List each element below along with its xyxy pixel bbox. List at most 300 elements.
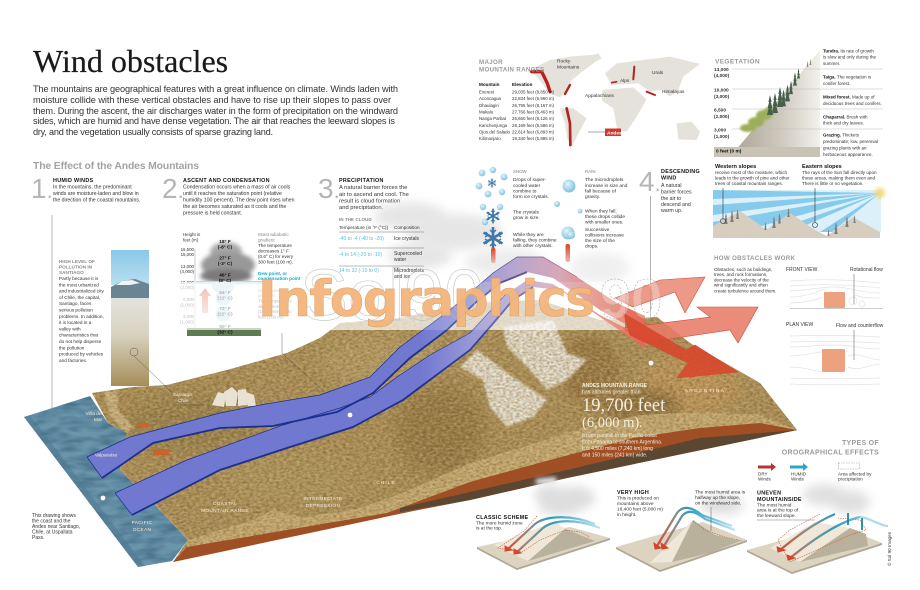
step 3: precipitation: and precipitation. xyxy=(339,205,384,211)
gradient notes: gradient xyxy=(258,238,275,242)
ocean xyxy=(20,390,190,570)
pollution note: characteristics that xyxy=(59,333,99,338)
mountain table: Ojos del Salado xyxy=(479,130,511,134)
watermark: Infographics xyxy=(258,270,595,328)
vegetation descriptions: Tundra. Its rate of growth xyxy=(823,48,874,54)
mountain table: 19,340 feet (5,895 m) xyxy=(512,136,555,141)
cloud composition table: -4 to 14 (-20 to -10) xyxy=(339,252,382,258)
gradient notes: Dew point, or xyxy=(258,271,287,276)
cities in orange xyxy=(137,423,169,455)
diagram: very high: The most humid area is xyxy=(695,490,746,496)
snow text: cooled water xyxy=(513,183,541,189)
vegetation descriptions: herbaceous appearance. xyxy=(823,152,873,157)
height inset: temperature by altitude: 13,000 xyxy=(181,264,195,269)
cloud composition table: and ice xyxy=(394,274,410,280)
diagram: very high: 16,400 feet (5,000 m) xyxy=(617,506,663,512)
temperature labels: 90° F xyxy=(219,324,231,330)
terrain labels: Santiago, xyxy=(173,392,193,398)
terrain labels: Chile xyxy=(178,398,189,404)
gradient notes: (0.6° C) for every xyxy=(258,254,294,259)
diagram: classic scheme: CLASSIC SCHEME xyxy=(476,515,529,521)
rain text: the size of the xyxy=(585,238,615,244)
plan view diagram: PLAN VIEW xyxy=(786,322,814,328)
cloud composition table: IN THE CLOUD xyxy=(339,217,372,222)
step 4: descending wind: A natural xyxy=(661,183,681,189)
diagram: uneven mountainside: the leeward slope. xyxy=(757,513,796,519)
height inset: temperature by altitude: 10,000 xyxy=(181,280,195,285)
rain text: increase in size and xyxy=(585,183,628,189)
snow fields xyxy=(460,350,547,427)
pollution note: POLLUTION IN xyxy=(59,264,93,270)
gradient notes: The temperature xyxy=(258,243,292,248)
step 4: descending wind: WIND xyxy=(661,176,677,182)
diagram: uneven mountainside: area is at the top of xyxy=(757,508,799,514)
gradient notes: condensation point xyxy=(258,276,301,281)
altitude labels: 0 feet (0 m) xyxy=(716,148,742,154)
rain text: these drops collide xyxy=(585,214,625,220)
altitude labels: 13,000 xyxy=(714,67,729,73)
panel: western and eastern slopes: leads to the growth of pine and other xyxy=(715,176,790,180)
callout: Andes mountain range: ANDES MOUNTAIN RANGE xyxy=(582,383,648,389)
step 4: descending wind xyxy=(639,166,700,363)
panel: western and eastern slopes: Western slopes xyxy=(715,164,756,170)
air parcels xyxy=(212,281,234,322)
descending red arrows xyxy=(615,277,758,378)
terrain labels: MOUNTAIN RANGE xyxy=(201,508,249,514)
pollution note: the most urbanized xyxy=(59,282,99,287)
snow text xyxy=(513,169,557,249)
height inset: temperature by altitude: 3,000 xyxy=(183,314,195,319)
rain text: with smaller ones. xyxy=(585,220,623,226)
panel: types of orographical effects legend: Area affected by xyxy=(838,472,872,476)
mountain table: Kilimanjaro xyxy=(479,136,501,141)
mountain table: 22,834 feet (6,960 m) xyxy=(512,96,555,101)
intro text: moisture collide with these vertical obstacles and have to rise up their slopes to pass over xyxy=(33,95,391,105)
mountain table: Kanchenjunga xyxy=(479,123,508,128)
temperature labels: 46° F xyxy=(219,272,231,278)
drawing note: Pass. xyxy=(32,535,45,541)
diagram: very high xyxy=(616,490,747,572)
vegetation descriptions: Chaparral. Brush with xyxy=(823,114,868,120)
plan view diagram: Flow and counterflow xyxy=(836,323,884,329)
diagram: very high: on the windward side. xyxy=(695,500,741,506)
pollution note: serious pollution xyxy=(59,308,93,312)
terrain block xyxy=(20,282,805,570)
cloud composition table: 14 to 32 (-10 to 0) xyxy=(339,268,379,274)
pollution note: Partly because it is xyxy=(59,276,99,281)
cloud composition table: Supercooled xyxy=(394,251,422,257)
vegetation descriptions: thick and dry leaves. xyxy=(823,120,864,126)
pollution note: of Chile, the capital, xyxy=(59,295,100,300)
panel: western and eastern slopes xyxy=(713,164,885,238)
step 3: precipitation: A natural barrier forces the xyxy=(339,185,407,191)
rising air arrow xyxy=(199,288,211,313)
rain text xyxy=(585,169,628,250)
mountain table: Elevation xyxy=(512,82,533,87)
terrain labels: INTERMEDIATE xyxy=(304,496,342,502)
rain text: Successive xyxy=(585,227,610,233)
panel: western and eastern slopes: The rays of the Sun fall directly upon xyxy=(802,170,877,175)
vegetation descriptions: deciduous trees and conifers. xyxy=(823,101,882,106)
height inset: temperature by altitude: 6,500 xyxy=(183,297,195,302)
step 1: humid winds: In the mountains, the predominant xyxy=(53,184,132,190)
pollution note: HIGH LEVEL OF xyxy=(59,259,95,264)
mountain table: Mountain xyxy=(479,82,500,87)
diagram: very high: This is produced on xyxy=(617,496,659,502)
altitude labels: 3,000 xyxy=(714,128,726,134)
terrain labels: ARGENTINA xyxy=(685,388,725,394)
cloud composition table: Microdroplets xyxy=(394,268,425,274)
panel: how obstacles work xyxy=(714,255,884,385)
panel: how obstacles work: HOW OBSTACLES WORK xyxy=(714,255,795,262)
temperature labels: (-3° C) xyxy=(218,261,232,267)
mountain table: Everest xyxy=(479,90,495,94)
intro text xyxy=(33,84,398,137)
altitude labels xyxy=(714,67,742,154)
step 1: humid winds xyxy=(31,173,140,204)
callout: Andes mountain range: It is 4,500 miles (7,240 km) long xyxy=(582,446,653,452)
conifers xyxy=(767,59,811,115)
step 4: descending wind: the air to xyxy=(661,196,681,202)
slopes xyxy=(713,211,880,238)
vegetation descriptions: Grazing. Thickets xyxy=(823,132,860,138)
height inset: temperature by altitude: 15,000 xyxy=(181,252,195,257)
height inset: temperature by altitude: feet (m) xyxy=(183,238,199,242)
snow text: The crystals xyxy=(513,210,539,216)
step 3: precipitation: air to ascend and cool. The xyxy=(339,192,409,198)
step 1: humid winds: the direction of the coastal mountains. xyxy=(53,198,140,204)
terrain labels: Mar xyxy=(94,417,103,423)
mountain table: 26,795 feet (8,167 m) xyxy=(512,103,555,108)
panel: types of orographical effects legend: precipitation xyxy=(838,476,863,482)
snow text: combine to xyxy=(513,188,537,194)
diagram: uneven mountainside: MOUNTAINSIDE xyxy=(757,497,802,503)
callout: Andes mountain range: It runs parallel to the Pacific coast xyxy=(582,433,657,439)
diagram: classic scheme: The more humid zone xyxy=(476,520,523,526)
temperature labels: (-8° C) xyxy=(218,244,232,250)
snow text: While they are xyxy=(513,232,544,238)
diagram: classic scheme xyxy=(476,477,610,570)
drawing note xyxy=(32,513,80,541)
intro text: dry, and the vegetation usually consists of sparse grazing land. xyxy=(33,127,273,137)
terrain labels: CHILE xyxy=(376,480,396,486)
panel: types of orographical effects legend: HUMID xyxy=(791,472,807,476)
panel: major mountain ranges map: MOUNTAIN RANGES xyxy=(479,66,545,74)
gradient notes: feet (100 m). xyxy=(258,314,284,320)
step 2: ascent and condensation: ASCENT AND CONDENSATION xyxy=(183,178,270,184)
snow icons xyxy=(476,167,507,263)
vegetation descriptions: conifer forest. xyxy=(823,81,850,86)
diagram: classic scheme: is at the top. xyxy=(476,526,502,532)
step 4: descending wind: barrier forces xyxy=(661,190,692,196)
step 2: ascent and condensation: Condensation occurs when a mass of air cools xyxy=(183,184,291,190)
pollution note: it is located in a xyxy=(59,320,92,325)
mountain table: 22,614 feet (6,893 m) xyxy=(512,130,555,134)
temperature labels: (12° C) xyxy=(217,296,233,302)
terrain labels: PACIFIC xyxy=(132,520,153,526)
diagram: very high: VERY HIGH xyxy=(617,490,649,496)
step 3: precipitation: 3. xyxy=(318,173,340,204)
rain text: RAIN xyxy=(585,169,596,174)
callout: Andes mountain range: 19,700 feet xyxy=(582,396,666,416)
diagram: uneven mountainside: The most humid xyxy=(757,502,792,508)
drawing note: Chile, at Uspallata xyxy=(32,530,73,536)
step 3: precipitation xyxy=(318,173,409,211)
pollution note: Santiago, faces xyxy=(59,301,92,306)
pollution note: and factories. xyxy=(59,358,87,363)
intro text: sides, which are humid and have dense vegetation. The air that reaches the leeward slopes is xyxy=(33,116,395,126)
drawing note: Andes near Santiago, xyxy=(32,524,80,530)
temperature labels: (8° C) xyxy=(219,278,232,284)
cloud composition table: Composition xyxy=(394,225,420,230)
step 4: descending wind: DESCENDING xyxy=(661,169,700,175)
snow text: grow in size. xyxy=(513,215,540,221)
wind band: upper xyxy=(87,257,645,478)
title: Wind obstacles xyxy=(33,43,228,79)
pollution note: SANTIAGO xyxy=(59,270,84,275)
Santiago city xyxy=(212,387,256,407)
altitude labels: (4,000) xyxy=(714,73,730,79)
snow text: with other crystals. xyxy=(513,243,553,249)
ground xyxy=(187,328,261,336)
cloud composition table xyxy=(339,217,425,280)
wind band: lower xyxy=(115,280,645,515)
band edges xyxy=(87,257,577,515)
step 4: descending wind: 4. xyxy=(639,166,661,197)
watermark xyxy=(170,256,662,336)
gradient notes: (1° C) every 300 xyxy=(258,309,292,314)
mountain table: 27,766 feet (8,463 m) xyxy=(512,110,555,114)
plan view diagram xyxy=(786,322,884,385)
gradient notes: decreases 1° F xyxy=(258,304,289,309)
terrain shading xyxy=(80,295,805,570)
vegetation descriptions: predominate; low, perennial xyxy=(823,139,878,144)
temperature labels: 72° F xyxy=(219,306,231,312)
panel: vegetation: VEGETATION xyxy=(715,58,760,66)
vegetation descriptions: summer. xyxy=(823,61,840,66)
gradient notes: The temperature xyxy=(258,298,292,304)
mountain table: Dhaulagiri xyxy=(479,103,499,108)
height inset: temperature by altitude: (4,000) xyxy=(180,269,195,274)
pollution note: do not help disperse xyxy=(59,339,102,344)
condensation band xyxy=(196,281,270,284)
height inset: temperature by altitude: 0 xyxy=(192,330,195,335)
terrain labels: OCEAN xyxy=(133,527,152,533)
callout: Andes mountain range xyxy=(582,383,666,458)
map heading: MAJOR xyxy=(479,59,503,66)
panel: types of orographical effects legend: Winds xyxy=(758,476,771,482)
panel: how obstacles work: decrease the velocity of the xyxy=(714,278,769,282)
panel: major mountain ranges map xyxy=(479,53,700,147)
rain text: The microdroplets xyxy=(585,177,624,183)
altitude labels: (3,000) xyxy=(714,94,730,100)
panel: types of orographical effects legend: OROGRAPHICAL EFFECTS xyxy=(782,450,879,456)
wash over the top of the ridge xyxy=(170,282,625,330)
snow text: Drops of super- xyxy=(513,177,546,183)
step 1: humid winds: HUMID WINDS xyxy=(53,178,94,184)
vegetation descriptions: Mixed forest. Made up of xyxy=(823,94,875,100)
bushes xyxy=(740,107,776,132)
temperature labels: 27° F xyxy=(219,256,231,262)
marker dots xyxy=(101,361,653,500)
world map xyxy=(530,53,700,147)
pollution note: and industrialized city xyxy=(59,289,104,294)
step 4: descending wind: descend and xyxy=(661,202,691,208)
mountain table: Makalu xyxy=(479,110,494,114)
mountain table: Aconcagua xyxy=(479,96,502,101)
callout: Andes mountain range: (6,000 m). xyxy=(582,415,643,431)
front view diagram xyxy=(786,267,883,308)
diagram: very high: halfway up the slope, xyxy=(695,495,740,501)
panel: how obstacles work: wind significantly and often xyxy=(714,282,768,288)
step 2: ascent and condensation: 2. xyxy=(162,173,184,204)
gradient notes: Moist adiabatic xyxy=(258,232,289,237)
range labels: Alps xyxy=(620,78,630,84)
altitude labels: (1,000) xyxy=(714,134,730,140)
step 3: precipitation: result is cloud formation xyxy=(339,198,400,204)
photo: Santiago valley inset xyxy=(111,250,149,386)
panel: types of orographical effects legend: Winds xyxy=(791,476,804,482)
diagram: uneven mountainside xyxy=(747,484,888,574)
diagram: very high: in height. xyxy=(617,512,636,518)
diagram: uneven mountainside: UNEVEN xyxy=(757,490,781,496)
intro text: them. During the ascent, the air discharges water in the form of precipitation on the windward xyxy=(33,106,398,116)
mountain table xyxy=(479,82,555,141)
range labels: Rocky xyxy=(557,58,571,64)
panel: types of orographical effects legend xyxy=(758,440,879,482)
panel: types of orographical effects legend: TYPES OF xyxy=(842,440,879,447)
rain text: collisions increase xyxy=(585,232,624,238)
cloud composition table: water xyxy=(394,257,407,263)
section heading: The Effect of the Andes Mountains xyxy=(33,161,199,172)
step 4: descending wind: warm up. xyxy=(661,208,682,214)
temperature labels: 18° F xyxy=(219,239,231,245)
terrain labels: Valparaíso xyxy=(95,452,118,458)
cloud composition table: Temperature (in °F (°C)) xyxy=(339,225,389,230)
cloud composition table: Ice crystals xyxy=(394,236,420,242)
range labels: Himalayas xyxy=(662,89,685,95)
callout: Andes mountain range: and 150 miles (241 km) wide. xyxy=(582,452,647,458)
soil strata xyxy=(173,423,797,562)
terrain labels: COASTAL xyxy=(213,501,237,507)
panel: western and eastern slopes: trees of coastal mountain ranges. xyxy=(715,181,783,186)
drawing note: the coast and the xyxy=(32,518,71,524)
altitude labels: (2,000) xyxy=(714,114,730,120)
panel: types of orographical effects legend: DRY xyxy=(758,472,768,476)
mountain table: 28,169 feet (8,586 m) xyxy=(512,123,555,128)
step 2: ascent and condensation: the air becomes saturated as it cools and the xyxy=(183,204,286,210)
sand ribbon xyxy=(187,412,797,547)
vegetation descriptions xyxy=(823,48,882,157)
height inset: temperature by altitude: (3,000) xyxy=(180,285,195,290)
mountain table: 26,660 feet (8,126 m) xyxy=(512,116,555,121)
copyright: © Sol 90 Images xyxy=(886,531,892,566)
range labels: Appalachians xyxy=(585,93,614,99)
altitude labels: 6,500 xyxy=(714,108,726,114)
gradient notes: Dry adiabatic xyxy=(258,288,286,293)
range labels: Mountains xyxy=(557,64,580,70)
diagram: very high: mountains above xyxy=(617,501,654,507)
sun xyxy=(875,188,885,198)
pollution note: problems. In addition, xyxy=(59,314,104,319)
callout: Andes mountain range: has altitudes greater than xyxy=(582,390,641,396)
temperature labels: (32° C) xyxy=(217,330,233,336)
temperature labels xyxy=(217,239,233,336)
snow text: falling, they combine xyxy=(513,238,557,244)
panel: vegetation xyxy=(714,48,883,157)
panel: how obstacles work: create turbulence around them. xyxy=(714,288,777,294)
mountain ranges in red xyxy=(532,67,655,145)
terrain labels: DEPRESSION xyxy=(306,503,340,509)
snow text: SNOW xyxy=(513,169,528,174)
step 2: ascent and condensation: humidity 100 percent). The dew point rises when xyxy=(183,198,295,204)
land surface xyxy=(92,300,797,562)
panel: how obstacles work: trees, and rock formations, xyxy=(714,272,767,277)
rain text: When they fall, xyxy=(585,208,617,214)
height inset: temperature by altitude xyxy=(180,232,301,336)
terrain labels xyxy=(85,388,725,533)
front view diagram: FRONT VIEW xyxy=(786,267,818,273)
rain text: fall because of xyxy=(585,188,617,194)
intro text: The mountains are geographical features with a great influence on climate. Winds laden with xyxy=(33,84,398,94)
height inset: temperature by altitude: Height in xyxy=(183,232,201,237)
mountain table: Nanga Parbat xyxy=(479,116,507,121)
pollution note xyxy=(52,215,104,498)
sand coast xyxy=(100,408,188,542)
pollution note: produced by vehicles xyxy=(59,352,104,357)
range labels: Andes xyxy=(607,130,622,136)
storm cloud xyxy=(200,242,255,283)
step 3: precipitation: PRECIPITATION xyxy=(339,178,384,184)
step 2: ascent and condensation: pressure is held constant. xyxy=(183,210,242,216)
watermark: Sol90 xyxy=(300,256,484,336)
step 1: humid winds: 1. xyxy=(31,173,53,204)
pollution note: valley with xyxy=(59,326,81,331)
front view diagram: Rotational flow xyxy=(850,267,883,273)
panel: how obstacles work: Obstacles, such as buildings, xyxy=(714,267,772,272)
gradient notes: decreases 1° F xyxy=(258,248,289,254)
temperature labels: 54° F xyxy=(219,290,231,296)
height inset: temperature by altitude: (2,000) xyxy=(180,302,195,308)
step 2: ascent and condensation xyxy=(162,173,295,216)
mountain table: 29,035 feet (8,850 m) xyxy=(512,90,555,94)
vegetation descriptions: Taiga. The vegetation is xyxy=(823,74,872,80)
range labels: Urals xyxy=(652,70,664,76)
clouds behind the ridge xyxy=(374,202,630,284)
height inset: temperature by altitude: (1,000) xyxy=(180,320,195,324)
rain icons xyxy=(554,180,582,262)
vegetation descriptions: grazing plants with an xyxy=(823,146,867,150)
sun rays illustration xyxy=(713,190,881,232)
terrain labels: Viña del xyxy=(85,411,103,417)
vegetation descriptions: is slow and only during the xyxy=(823,54,877,60)
mountain slope xyxy=(730,50,820,157)
altitude labels: 10,000 xyxy=(714,88,729,94)
gradient notes xyxy=(258,232,301,320)
step 2: ascent and condensation: until it reaches the saturation point (relative xyxy=(183,191,282,197)
watermark: 90 xyxy=(600,267,662,330)
panel: western and eastern slopes: Eastern slopes xyxy=(802,164,842,170)
rain text: gravity. xyxy=(585,194,600,200)
snow text: form ice crystals. xyxy=(513,194,549,200)
callout: Andes mountain range: from Panama to southern Argentina. xyxy=(582,440,662,446)
panel: western and eastern slopes: these areas, making them even and xyxy=(802,176,875,180)
panel: western and eastern slopes: There is little or no vegetation. xyxy=(802,181,864,186)
panel: western and eastern slopes: receive most of the moisture, which xyxy=(715,170,787,175)
drawing note: This drawing shows xyxy=(32,513,76,519)
sight lines xyxy=(134,333,350,415)
temperature labels: (22° C) xyxy=(217,312,233,318)
